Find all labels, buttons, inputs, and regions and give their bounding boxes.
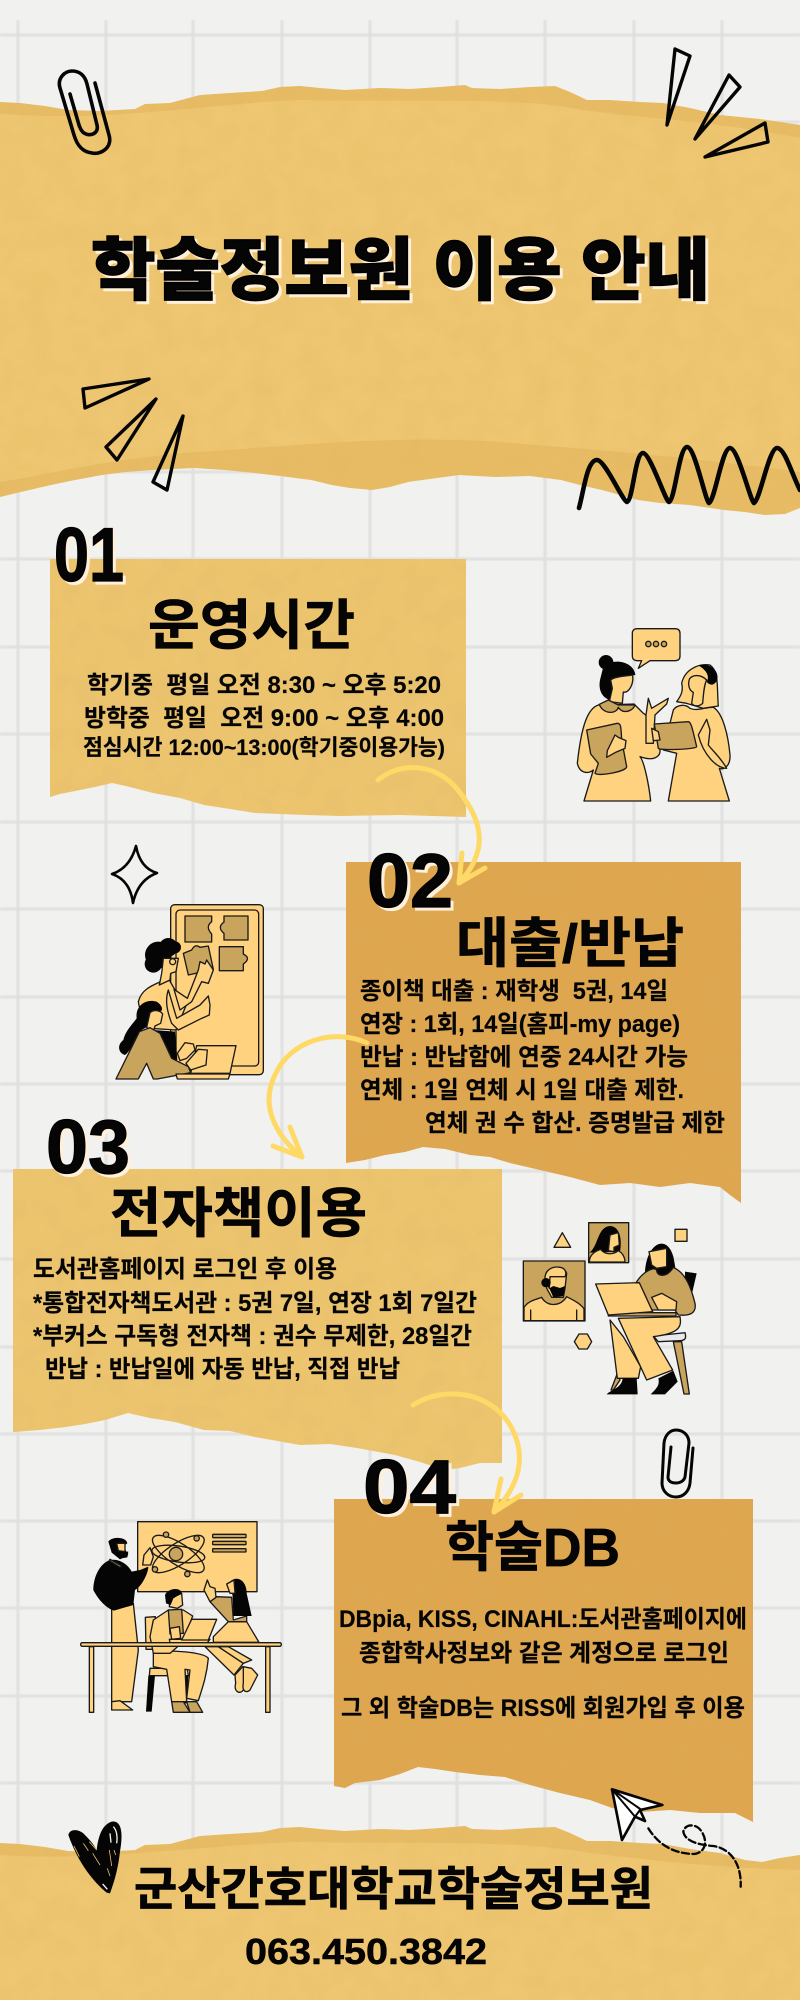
heading: 운영시간: 운영시간 <box>148 596 355 656</box>
panel: 전자책이용 <box>13 1105 502 1470</box>
arrow: 02 to 03 <box>269 1037 367 1157</box>
number 01: 01 <box>54 513 124 598</box>
heading: 대출/반납: 대출/반납 <box>456 914 684 974</box>
text block: lending rules: 연체 : 1일 연체 시 1일 대출 제한. <box>360 1077 684 1104</box>
arrow: 03 to 04 <box>413 1394 521 1512</box>
illustration: people with puzzle board <box>116 905 263 1079</box>
icon: spikes top right <box>667 49 768 157</box>
text block: database access: DBpia, KISS, CINAHL:도서관홈페이지에 <box>339 1606 747 1633</box>
text block: hours <box>83 672 445 760</box>
text block: hours: 학기중 평일 오전 8:30 ~ 오후 5:20 <box>87 672 441 699</box>
icon: paperclip middle right <box>662 1430 693 1497</box>
number 03: 03 <box>46 1105 130 1190</box>
text block: database access <box>339 1606 747 1722</box>
text block: e-book rules: *부커스 구독형 전자책 : 권수 무제한, 28일간 <box>33 1323 472 1350</box>
number 02: 02 <box>367 839 453 924</box>
illustration: woman on laptop with video call frames <box>523 1223 697 1394</box>
footer phone number: 063.450.3842 <box>245 1931 487 1972</box>
illustration: two women talking <box>577 629 730 801</box>
text block: hours: 점심시간 12:00~13:00(학기중이용가능) <box>83 735 445 760</box>
text block: lending rules: 반납 : 반납함에 연중 24시간 가능 <box>360 1044 688 1071</box>
panel: 대출/반납 <box>346 839 741 1203</box>
illustration: team at science board <box>81 1522 281 1712</box>
heading: 학술DB: 학술DB <box>445 1518 620 1578</box>
footer title: 군산간호대학교학술정보원 <box>134 1863 653 1915</box>
text block: lending rules: 연체 권 수 합산. 증명발급 제한 <box>425 1110 725 1137</box>
arrow: 01 to 02 <box>378 768 485 883</box>
text block: e-book rules: 반납 : 반납일에 자동 반납, 직접 반납 <box>45 1356 400 1383</box>
panel: 운영시간 <box>50 513 466 817</box>
text block: lending rules: 종이책 대출 : 재학생 5권, 14일 <box>360 978 668 1005</box>
icon: heart <box>68 1822 122 1893</box>
icon: zigzag squiggle <box>579 447 800 508</box>
text block: database access: 그 외 학술DB는 RISS에 회원가입 후 이용 <box>341 1695 745 1722</box>
text block: database access: 종합학사정보와 같은 계정으로 로그인 <box>359 1640 729 1667</box>
icon: paperclip top left <box>59 71 110 153</box>
panel: 학술DB <box>334 1445 753 1822</box>
panel: footer torn paper <box>0 1826 800 2000</box>
text block: e-book rules: 도서관홈페이지 로그인 후 이용 <box>33 1256 337 1283</box>
text block: e-book rules: *통합전자책도서관 : 5권 7일, 연장 1회 7일간 <box>33 1290 477 1317</box>
icon: spikes lower left of header <box>83 379 183 490</box>
icon: paper plane with dashed trail <box>612 1789 741 1887</box>
panel: header torn paper <box>0 85 800 515</box>
text block: e-book rules <box>33 1256 477 1383</box>
text block: lending rules <box>360 978 725 1137</box>
text block: hours: 방학중 평일 오전 9:00 ~ 오후 4:00 <box>84 705 444 732</box>
heading: 전자책이용: 전자책이용 <box>110 1184 367 1244</box>
title: 학술정보원 이용 안내 <box>91 233 710 309</box>
icon: sparkle <box>112 846 157 903</box>
number 04: 04 <box>363 1445 456 1530</box>
text block: lending rules: 연장 : 1회, 14일(홈피-my page) <box>360 1011 680 1038</box>
